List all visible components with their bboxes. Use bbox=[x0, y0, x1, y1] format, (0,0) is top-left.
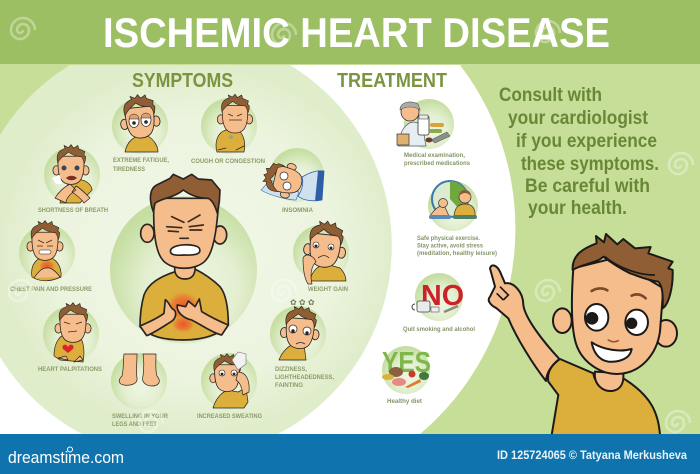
icon: central boy with chest pain bbox=[110, 174, 257, 344]
text block: consult advice: your cardiologist bbox=[508, 108, 649, 129]
icon: increased sweating bbox=[201, 352, 257, 409]
label: medical examination: Medical examination, bbox=[404, 153, 465, 159]
text block: consult advice: if you experience bbox=[516, 131, 657, 152]
text block: consult advice: Be careful with bbox=[525, 176, 650, 197]
label: quit smoking: Quit smoking and alcohol bbox=[403, 327, 475, 333]
icon: cough bbox=[201, 94, 257, 154]
label: weight gain: WEIGHT GAIN bbox=[308, 286, 348, 293]
label: fatigue bbox=[113, 157, 169, 173]
text block: consult advice bbox=[499, 85, 659, 219]
icon: dizziness: ✿ ✿ ✿ bbox=[290, 298, 315, 307]
icon: chest pain bbox=[19, 221, 75, 281]
label: sweating: INCREASED SWEATING bbox=[197, 413, 262, 420]
label: cough: COUGH OR CONGESTION bbox=[191, 158, 265, 165]
label: swelling: SWELLING IN YOUR bbox=[112, 413, 168, 420]
label: breath: SHORTNESS OF BREATH bbox=[38, 207, 108, 214]
label: physical exercise: Safe physical exercise. bbox=[417, 236, 480, 242]
panel: symptoms circle bbox=[0, 65, 392, 434]
icon: weight gain bbox=[293, 219, 349, 284]
icon: extreme fatigue bbox=[112, 93, 168, 154]
icon: no smoking and alcohol: NO bbox=[421, 280, 464, 312]
label: physical exercise: Stay active, avoid stress bbox=[417, 244, 484, 250]
text block: consult advice: your health. bbox=[528, 198, 627, 219]
label: fatigue: TIREDNESS bbox=[113, 166, 145, 173]
heading: symptoms: SYMPTOMS bbox=[132, 70, 233, 92]
white treatment panel bbox=[0, 65, 515, 434]
icon: insomnia bbox=[260, 148, 324, 202]
icon: swollen legs bbox=[111, 353, 167, 409]
footer logo text: dreamstime.com bbox=[8, 448, 124, 467]
label: dizziness: DIZZINESS, bbox=[275, 366, 307, 373]
icon: dizziness bbox=[270, 298, 326, 362]
footer logo spiral bbox=[68, 447, 72, 452]
icon: medical examination bbox=[397, 99, 454, 149]
text block: consult advice: Consult with bbox=[499, 85, 602, 106]
label: physical exercise bbox=[417, 236, 497, 257]
label: chest pain: CHEST PAIN AND PRESSURE bbox=[10, 286, 93, 293]
label: palpitations: HEART PALPITATIONS bbox=[38, 366, 103, 373]
label: medical examination: prescribed medications bbox=[404, 161, 471, 167]
icon: shortness of breath bbox=[44, 145, 100, 203]
header banner bbox=[0, 0, 700, 64]
label: medical examination bbox=[404, 153, 471, 167]
label: swelling bbox=[112, 413, 168, 428]
icon: healthy diet bbox=[382, 346, 431, 394]
label: dizziness bbox=[275, 366, 334, 389]
label: dizziness: LIGHTHEADEDNESS, bbox=[275, 374, 334, 381]
label: healthy diet: Healthy diet bbox=[387, 399, 422, 405]
text block: consult advice: these symptoms. bbox=[521, 154, 659, 175]
label: swelling: LEGS AND FEET bbox=[112, 421, 157, 428]
label: insomnia: INSOMNIA bbox=[282, 207, 313, 214]
icon: physical exercise bbox=[428, 181, 478, 231]
icon: healthy diet: YES bbox=[382, 347, 431, 379]
heading: treatment: TREATMENT bbox=[337, 70, 447, 92]
label: fatigue: EXTREME FATIGUE, bbox=[113, 157, 169, 164]
label: physical exercise: (meditation, healthy leisure) bbox=[417, 251, 497, 257]
footer credit text: ID 125724065 © Tatyana Merkusheva bbox=[497, 450, 688, 462]
icon: heart palpitations bbox=[43, 303, 99, 362]
title: ISCHEMIC HEART DISEASE bbox=[103, 9, 610, 56]
icon: pointing cartoon boy bbox=[489, 234, 677, 435]
footer bar bbox=[0, 434, 700, 474]
label: dizziness: FAINTING bbox=[275, 382, 303, 389]
icon: no smoking and alcohol bbox=[412, 273, 464, 321]
